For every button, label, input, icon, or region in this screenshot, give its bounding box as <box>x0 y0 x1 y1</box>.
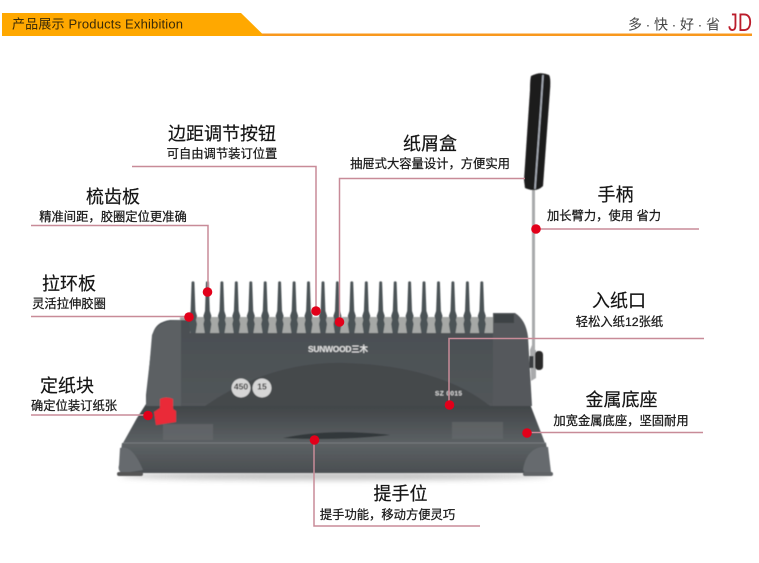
callout: paper stop block <box>31 376 153 420</box>
JD logo: JD <box>728 9 752 37</box>
callout: paper scrap box: 抽屉式大容量设计，方便实用 <box>350 156 510 171</box>
callout: comb plate <box>31 187 212 297</box>
handle lever <box>524 73 550 381</box>
badge 15 <box>252 378 272 398</box>
callout: comb plate: 梳齿板 <box>86 187 140 207</box>
model number: SZ 0015 <box>435 390 462 398</box>
callout: handle <box>531 185 699 234</box>
comb strip <box>180 317 496 334</box>
badge 15: 15 <box>257 382 267 392</box>
header title: 产品展示 Products Exhibition <box>12 16 183 32</box>
callout: margin adjust button: 边距调节按钮 <box>168 124 276 144</box>
callout: paper scrap box <box>335 134 525 327</box>
machine body <box>146 320 495 406</box>
comb teeth <box>189 281 486 333</box>
callout: paper stop block: 确定位装订纸张 <box>31 398 117 413</box>
brand logo: SUNWOOD三木 <box>308 344 368 354</box>
callout: paper inlet: 入纸口 <box>592 291 646 311</box>
callout: margin adjust button <box>132 124 321 316</box>
base shadow <box>120 472 550 480</box>
callout: pull ring plate <box>31 274 194 322</box>
callout: pull ring plate: 灵活拉伸胶圈 <box>32 296 106 311</box>
callout: paper stop block: 定纸块 <box>40 376 94 396</box>
callout: handle: 手柄 <box>598 185 634 205</box>
callout: paper inlet <box>445 291 704 410</box>
red paper stop <box>154 398 176 425</box>
callout: metal base: 金属底座 <box>586 390 658 410</box>
badge 450: 450 <box>234 382 248 392</box>
callout: handle: 加长臂力，使用 省力 <box>547 208 661 223</box>
slogan: 多·快·好·省 <box>628 16 720 32</box>
callout: paper scrap box: 纸屑盒 <box>403 134 457 154</box>
metal base <box>117 404 553 476</box>
callout: carrying handle: 提手位 <box>374 484 428 504</box>
callout: carrying handle: 提手功能，移动方便灵巧 <box>320 507 455 522</box>
badge 450 <box>232 378 250 398</box>
callout: margin adjust button: 可自由调节装订位置 <box>167 146 277 161</box>
right end cap <box>493 313 532 406</box>
callout: carrying handle <box>310 435 480 526</box>
carry handle slot <box>283 432 390 439</box>
callout: metal base: 加宽金属底座，坚固耐用 <box>553 413 689 428</box>
callout: pull ring plate: 拉环板 <box>42 274 96 294</box>
callout: comb plate: 精准间距，胶圈定位更准确 <box>39 209 187 224</box>
callout: paper inlet: 轻松入纸12张纸 <box>576 315 663 329</box>
callout: metal base <box>522 390 703 438</box>
header banner <box>2 13 752 36</box>
product: comb binding machine <box>117 73 553 480</box>
